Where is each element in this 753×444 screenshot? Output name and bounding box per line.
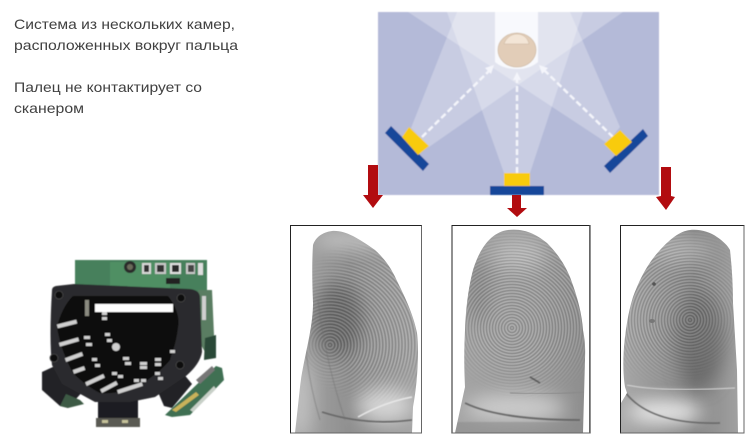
text: no contact: Палец не контактирует со [14,79,202,95]
panel: centre fingerprint [452,225,590,433]
finger slot glow [495,12,538,69]
light beam: centre camera [447,12,583,173]
icon: left camera [385,126,429,171]
screw holes [50,291,185,369]
panel: scanner diagram [378,12,659,195]
text: with the scanner: сканером [14,100,84,116]
icon: finger cross-section [498,33,536,67]
text: cameras around finger: расположенных вокруг пальца [14,37,238,53]
arrow: centre camera to finger [516,79,518,173]
arrow: right output [656,167,675,210]
text block: description [14,16,238,116]
arrow: left camera to finger [422,70,490,137]
camera pods [42,366,192,427]
device photo: scanner module [42,260,224,427]
light beam: left camera [411,12,623,147]
arrow: right camera to finger [543,69,613,137]
camera LEDs [57,300,175,394]
panel: right fingerprint [620,225,744,433]
housing: black frame [50,284,202,402]
arrow: left output [363,165,383,208]
icon: centre camera [490,173,544,195]
housing: D-shaped opening [57,296,179,393]
icon: right camera [604,129,648,173]
text: camera system: Система из нескольких камер, [14,16,235,32]
light beam: right camera [408,12,620,143]
top circuit board [75,260,207,295]
panel: left fingerprint [288,225,422,440]
arrow: centre output [507,195,527,217]
white slot [95,304,173,312]
side circuit boards [198,290,216,360]
right circuit board [165,366,224,417]
